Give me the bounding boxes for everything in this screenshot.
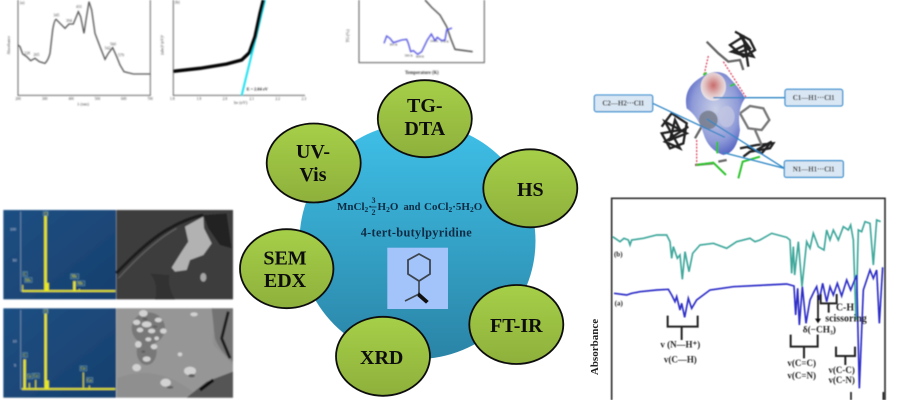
SEM image: Co complex	[116, 308, 233, 398]
chart: TG-DTA thermal curves: Temperature (K)	[405, 71, 439, 76]
chart: Tauc band gap plot: 1.9	[197, 97, 201, 101]
bracket: C=C, C=N: v(C=N)	[787, 371, 816, 381]
spectrum labels: (b)	[614, 251, 623, 259]
central blue disc	[300, 123, 536, 359]
chart: UV-Vis absorbance spectrum: 579	[118, 52, 124, 57]
text: metal salt formula: and	[404, 202, 421, 213]
chart: UV-Vis absorbance spectrum: Absorbance	[6, 36, 11, 55]
bracket: C-C, C-N	[828, 347, 855, 385]
node: XRD	[336, 317, 430, 396]
arrow: CH3 deformation	[803, 295, 836, 336]
EDX spectrum: Mn complex: Mn	[25, 278, 31, 282]
chart: UV-Vis absorbance spectrum: 431	[76, 4, 82, 9]
panel: Hirshfeld surface molecule	[594, 32, 843, 178]
bracket: C-H scissoring	[821, 294, 867, 325]
arrow: CH3 deformation: δ(−CH₃)	[803, 325, 836, 336]
panel: FT-IR spectra: (a)	[615, 299, 623, 307]
green halogen bonds	[697, 73, 760, 178]
bracket: N-H, C-H: v (N—H⁺)	[660, 340, 700, 350]
node: UV-Vis	[267, 124, 361, 202]
text: metal salt formula: 2	[386, 205, 390, 214]
chart: UV-Vis absorbance spectrum: 200	[15, 97, 21, 101]
axis label: Absorbance: Absorbance	[589, 319, 601, 375]
chart: UV-Vis absorbance spectrum: 300	[42, 97, 48, 101]
text: metal salt formula: H	[378, 201, 386, 213]
EDX spectrum: Mn complex: C	[24, 272, 27, 276]
chart: UV-Vis absorbance spectrum: 500	[95, 97, 100, 101]
chart: Tauc band gap plot: 1.8	[170, 97, 175, 101]
chart: UV-Vis absorbance spectrum: 394	[66, 18, 72, 23]
node: TG-DTA: TG-	[407, 95, 443, 117]
EDX spectrum: Co complex	[3, 308, 116, 398]
text: metal salt formula: O	[474, 201, 483, 213]
SEM image: Mn complex	[116, 210, 233, 299]
chart: Tauc band gap plot: (αhv)² (eV)²	[159, 34, 164, 55]
EDX spectrum: Mn complex: 100	[10, 228, 16, 232]
chart: TG-DTA thermal curves: 548 K	[430, 39, 439, 43]
chart: UV-Vis absorbance spectrum: 700	[147, 97, 153, 101]
chart: UV-Vis absorbance spectrum: λ (nm)	[77, 101, 89, 106]
chart: Tauc band gap plot: 2.2	[275, 97, 280, 101]
node: UV-Vis: Vis	[299, 164, 327, 186]
chart: TG-DTA thermal curves: 578 K	[441, 40, 449, 44]
bracket: N-H, C-H	[660, 316, 700, 364]
node: UV-Vis: UV-	[296, 141, 330, 163]
text: metal salt formula: ·	[368, 201, 372, 213]
bracket: C-C, C-N: v(C-C)	[828, 365, 855, 375]
node: FT-IR	[469, 285, 563, 364]
label: C1-H1...Cl1: C1—H1···Cl1	[793, 94, 835, 102]
EDX spectrum: Co complex: Co	[34, 374, 38, 378]
chart: Tauc band gap plot: 2.0	[223, 97, 227, 101]
EDX spectrum: Co complex: Cl	[44, 310, 48, 314]
bracket: C-H scissoring: C-H	[836, 303, 854, 314]
chart: TG-DTA thermal curves: 583 K	[405, 54, 413, 58]
surface	[686, 72, 745, 155]
chart: Tauc band gap plot	[159, 0, 306, 105]
label: C2-H2...Cl1: C2—H2···Cl1	[602, 100, 645, 108]
text: metal salt formula: 2	[470, 205, 474, 214]
node: SEM EDX	[240, 229, 333, 308]
icon: 4-tert-butylpyridine structure	[387, 248, 448, 309]
text: metal salt formula: O	[390, 201, 399, 213]
EDX spectrum: Co complex: 5	[14, 363, 16, 367]
chart: UV-Vis absorbance spectrum: 560	[110, 41, 116, 46]
EDX spectrum: Co complex: Co	[81, 367, 85, 371]
text: metal salt formula: ·5H	[452, 201, 470, 213]
label: C2-H2...Cl1	[594, 95, 653, 112]
chart: UV-Vis absorbance spectrum: (a)	[20, 0, 25, 5]
chart: TG-DTA thermal curves: 393 K	[389, 43, 398, 47]
EDX spectrum: Mn complex	[3, 210, 116, 299]
spectrum (a) blue	[614, 267, 883, 388]
node: SEM EDX: EDX	[264, 270, 307, 292]
node: HS: HS	[517, 179, 544, 201]
chart: UV-Vis absorbance spectrum: 228	[24, 50, 30, 55]
chart: UV-Vis absorbance spectrum: 265	[33, 52, 39, 57]
node: SEM EDX: SEM	[263, 248, 307, 270]
chart: Tauc band gap plot: E = 2.04 eV	[247, 87, 269, 92]
text: metal salt formula: 3	[372, 196, 376, 205]
EDX spectrum: Mn complex: Cl	[44, 212, 48, 216]
chart: TG-DTA thermal curves: 609 K	[416, 55, 425, 59]
chart: UV-Vis absorbance spectrum: 600	[121, 97, 127, 101]
node: XRD: XRD	[360, 347, 403, 369]
chart: UV-Vis absorbance spectrum	[6, 0, 153, 106]
leader lines	[653, 98, 785, 168]
EDX spectrum: Mn complex: Mn	[78, 282, 83, 286]
EDX spectrum: Co complex: Co	[27, 375, 31, 379]
label: N1-H1...Cl1: N1—H1···Cl1	[793, 165, 835, 173]
text: ligand name: 4-tert-butylpyridine	[361, 226, 472, 240]
bracket: C-C, C-N: v(C-N)	[828, 375, 855, 385]
text: metal salt formula	[337, 196, 483, 217]
EDX spectrum: Mn complex: Mn	[72, 275, 77, 279]
text: metal salt formula: 2	[448, 205, 452, 214]
text: metal salt formula: MnCl	[337, 201, 364, 213]
chart: TG-DTA thermal curves	[345, 0, 484, 76]
frame	[612, 198, 885, 400]
bracket: C=C, C=N	[787, 335, 818, 381]
node: TG-DTA	[378, 80, 472, 157]
chart: Tauc band gap plot: 2.1	[249, 97, 254, 101]
chart: UV-Vis absorbance spectrum: 542	[105, 46, 111, 51]
EDX spectrum: Co complex: Co	[87, 378, 92, 382]
EDX spectrum: Co complex: 10	[13, 340, 17, 344]
chart: Tauc band gap plot: hv (eV)	[234, 100, 248, 105]
chart: TG-DTA thermal curves: TG (%)	[345, 29, 350, 43]
EDX spectrum: Co complex: C	[24, 353, 27, 357]
bracket: C-H scissoring: scissoring	[825, 314, 867, 325]
molecule fragments	[662, 32, 773, 165]
label: N1-H1...Cl1	[784, 161, 843, 177]
node: HS	[483, 149, 577, 227]
chart: Tauc band gap plot: 2.3	[302, 97, 306, 101]
chart: UV-Vis absorbance spectrum: 400	[68, 97, 74, 101]
contact lines	[697, 56, 747, 165]
chart: UV-Vis absorbance spectrum: 345	[53, 12, 59, 17]
bracket: C=C, C=N: v(C=C)	[787, 358, 816, 368]
text: metal salt formula: CoCl	[424, 201, 448, 213]
EDX spectrum: Mn complex: 50	[13, 259, 17, 263]
text: metal salt formula: 2	[364, 205, 368, 214]
node: TG-DTA: DTA	[404, 118, 446, 140]
panel: FT-IR spectra	[612, 198, 885, 400]
panel: SEM-EDX images and spectra	[3, 210, 233, 398]
label: C1-H1...Cl1	[785, 89, 843, 106]
spectrum (b) teal	[613, 220, 881, 320]
text: metal salt formula: 2	[372, 208, 376, 217]
node: FT-IR: FT-IR	[490, 315, 543, 337]
bracket: N-H, C-H: v(C—H)	[664, 354, 697, 364]
